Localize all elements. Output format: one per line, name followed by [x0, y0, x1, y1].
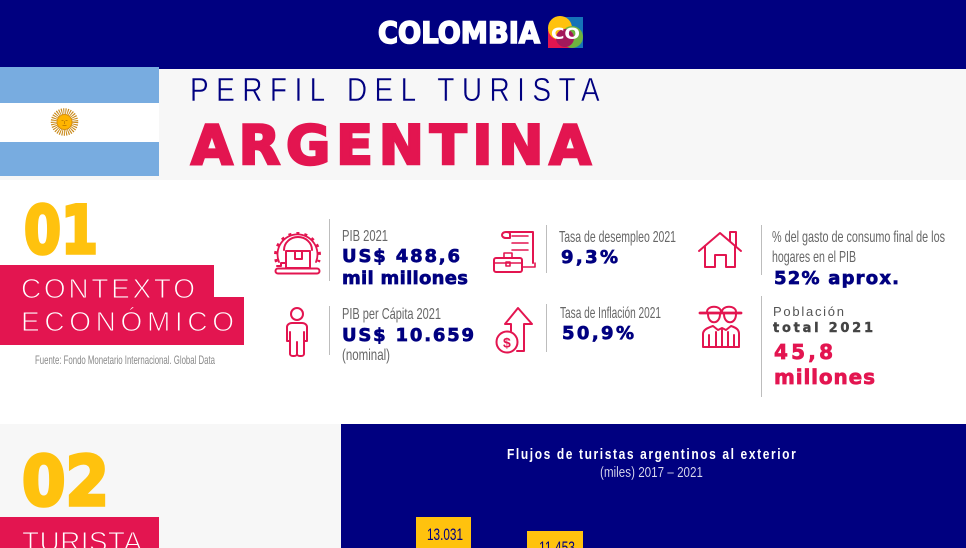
- stat: PIB 2021: US$ 488,6: [342, 246, 460, 267]
- stat: gasto de consumo: [699, 225, 945, 289]
- logo: Colombia CO: CO: [551, 24, 580, 43]
- panel: flujos de turistas chart: [341, 424, 966, 548]
- chart title: Flujos de turistas argentinos al exterior: [507, 446, 796, 462]
- stat: PIB 2021: mil millones: [342, 268, 468, 289]
- stat: desempleo: 9,3%: [561, 247, 618, 268]
- icon: sun of May: [54, 112, 75, 132]
- icon: factory gear: [276, 233, 320, 274]
- section label: contexto economico: CONTEXTO: [21, 273, 195, 304]
- stat: PIB per capita: [287, 306, 474, 364]
- stat: inflacion: [496, 304, 661, 352]
- section number 01: 01: [24, 192, 98, 269]
- logo: Colombia CO: COLOMBIA: [378, 16, 541, 50]
- stat: poblacion: Población: [773, 304, 844, 319]
- stat: poblacion: millones: [774, 365, 875, 389]
- title panel: [0, 69, 966, 180]
- icon: arrow up with dollar coin: $: [503, 334, 511, 350]
- bar 2018: [527, 531, 583, 548]
- header band: [0, 0, 966, 69]
- stat: inflacion: 50,9%: [562, 323, 634, 344]
- stat: poblacion: total 2021: [773, 321, 873, 336]
- icon: briefcase and document: [494, 232, 535, 272]
- stat: PIB per capita: US$ 10.659: [342, 325, 474, 346]
- stat: gasto de consumo: hogares en el PIB: [772, 249, 856, 266]
- icon: two tourists with hats: [700, 307, 741, 347]
- bar 2017: [416, 517, 471, 548]
- title line: perfil del turista: PERFIL DEL TURISTA: [190, 72, 600, 109]
- stat: desempleo: Tasa de desempleo 2021: [559, 229, 676, 246]
- stat: PIB per capita: (nominal): [342, 347, 390, 364]
- title: Argentina: ARGENTINA: [191, 114, 591, 177]
- icon: person: [287, 308, 307, 356]
- section label: contexto economico: ECONÓMICO: [21, 306, 234, 337]
- stat: poblacion: [700, 296, 875, 397]
- source note: Fuente: Fondo Monetario Internacional. Global Data: [35, 353, 215, 367]
- stat: PIB 2021: [276, 219, 468, 289]
- Argentine flag: [0, 67, 159, 176]
- icon: arrow up with dollar coin: [496, 308, 532, 352]
- section label: turista: [0, 517, 159, 548]
- chart subtitle: (miles) 2017 – 2021: [600, 464, 703, 481]
- icon: house: [699, 232, 741, 267]
- stat: desempleo: [494, 225, 676, 273]
- bar 2017: 13.031: [427, 525, 463, 544]
- panel: turista sidebar: [0, 424, 341, 548]
- stat: poblacion: 45,8: [774, 340, 833, 364]
- stat: inflacion: Tasa de Inflación 2021: [560, 305, 661, 322]
- stat: PIB 2021: PIB 2021: [342, 228, 388, 245]
- section number 02: 02: [22, 442, 109, 522]
- stat: PIB per capita: PIB per Cápita 2021: [342, 306, 441, 323]
- stat: gasto de consumo: 52% aprox.: [774, 268, 899, 289]
- section label: contexto economico: [0, 265, 244, 345]
